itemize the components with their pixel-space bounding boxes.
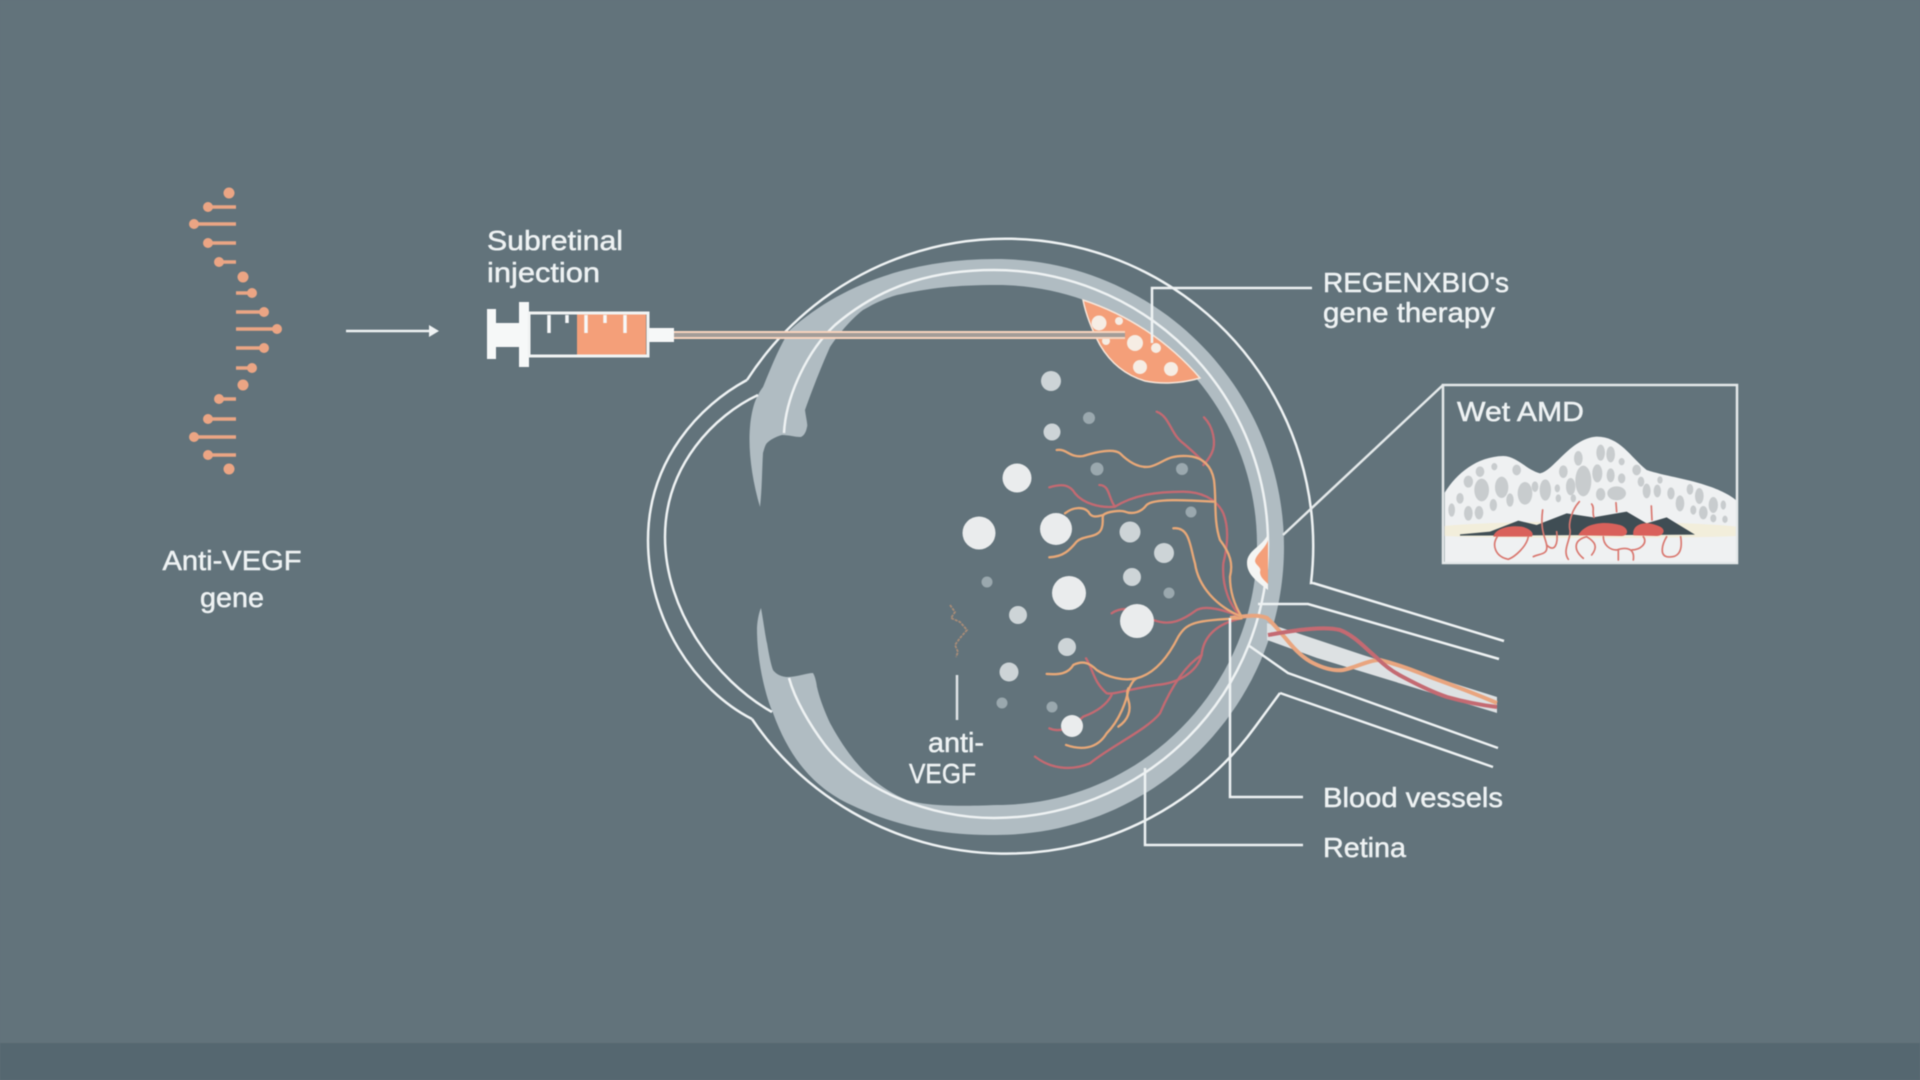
inner retina line bbox=[784, 270, 1268, 818]
callout: anti-VEGF with squiggle: anti- bbox=[928, 727, 984, 758]
connector line bbox=[1283, 385, 1443, 535]
callout: REGENXBIO's gene therapy bbox=[1152, 267, 1509, 343]
callout: anti-VEGF with squiggle bbox=[909, 605, 984, 789]
icon: syringe and needle bbox=[487, 302, 1125, 367]
callout: Blood vessels bbox=[1230, 618, 1503, 813]
label: Anti-VEGF gene bbox=[162, 545, 302, 613]
label: Subretinal injection: injection bbox=[487, 257, 600, 288]
callout: Blood vessels: Blood vessels bbox=[1323, 782, 1503, 813]
optic nerve bbox=[1230, 583, 1504, 767]
anti-VEGF protein dots bbox=[962, 371, 1196, 737]
callout: REGENXBIO's gene therapy: REGENXBIO's bbox=[1323, 267, 1509, 298]
heading: Wet AMD: Wet AMD bbox=[1457, 396, 1584, 427]
blood vessels in the retina bbox=[1035, 412, 1242, 768]
label: Subretinal injection bbox=[487, 225, 623, 288]
retina cross-section bbox=[1445, 437, 1737, 563]
callout: REGENXBIO's gene therapy: gene therapy bbox=[1323, 297, 1495, 328]
arrow: gene to syringe bbox=[346, 325, 439, 337]
callout: anti-VEGF with squiggle: VEGF bbox=[909, 758, 976, 789]
label: Anti-VEGF gene: gene bbox=[200, 582, 264, 613]
label: Anti-VEGF gene: Anti-VEGF bbox=[162, 545, 302, 576]
icon: anti-VEGF gene strand bbox=[189, 188, 282, 474]
eye: optic disc bbox=[1247, 534, 1268, 590]
outer eye wall bbox=[648, 380, 752, 719]
bottom strip bbox=[0, 1043, 1920, 1080]
panel: Wet AMD inset bbox=[1283, 385, 1737, 563]
callout: Retina bbox=[1145, 768, 1406, 863]
inset frame bbox=[1443, 385, 1737, 563]
label: Subretinal injection: Subretinal bbox=[487, 225, 623, 256]
callout: Retina: Retina bbox=[1323, 832, 1406, 863]
gene therapy bleb bbox=[1083, 300, 1200, 383]
eye: sclera and retina bbox=[648, 239, 1313, 854]
retinal band bbox=[749, 259, 1284, 835]
